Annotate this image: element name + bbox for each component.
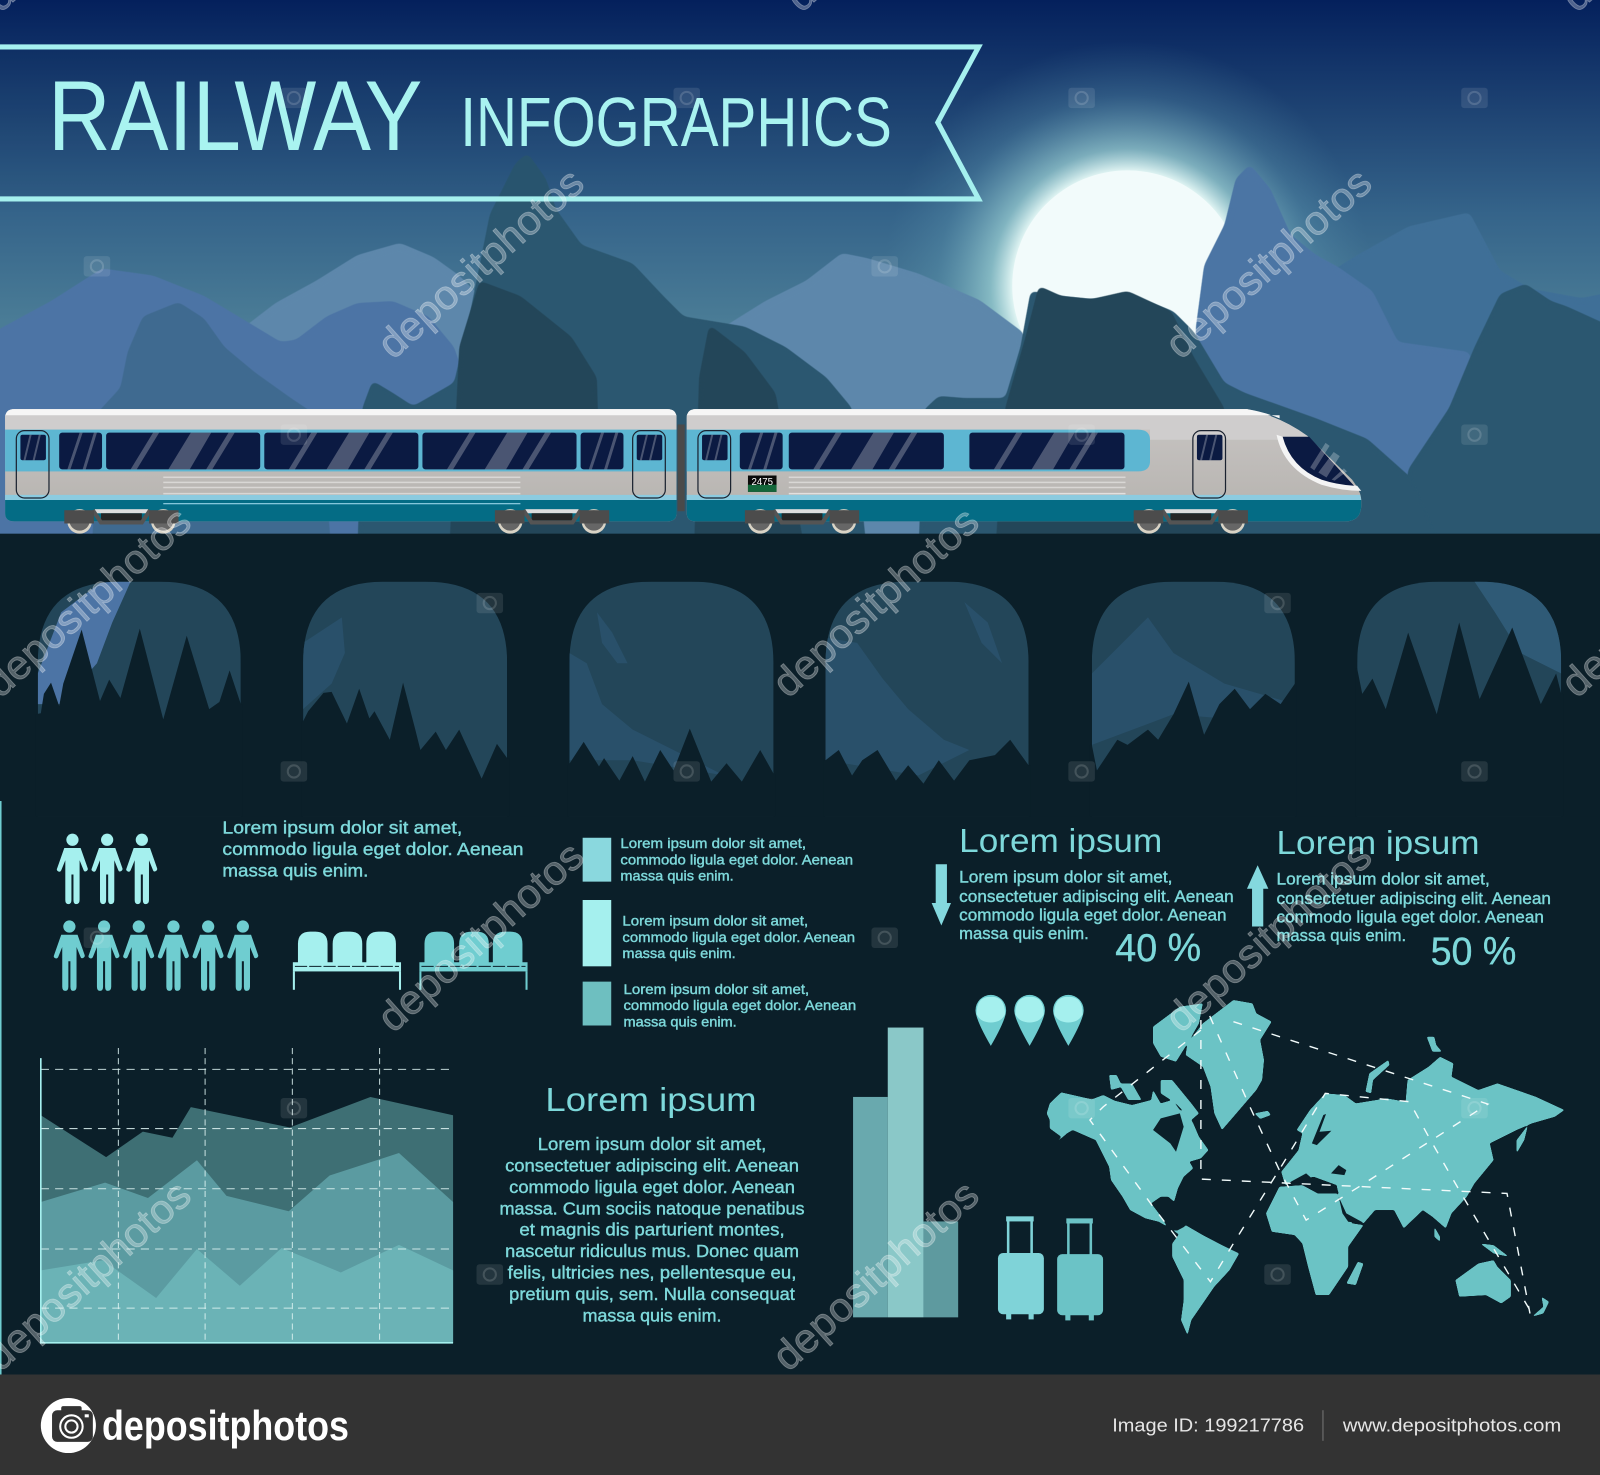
icon: suitcase teal [1057,1218,1103,1320]
rear carriage [5,409,677,521]
heading: Lorem ipsum [959,823,1162,860]
title: INFOGRAPHICS: INFOGRAPHICS [460,83,892,161]
description: Lorem ipsum dolor sit amet, [1277,871,1490,889]
paragraph: et magnis dis parturient montes, [519,1220,785,1240]
description: massa quis enim. [1277,927,1406,945]
people icons [54,834,258,991]
legend item 1: Lorem ipsum dolor sit amet, [620,836,806,851]
arch 4 [826,582,1028,784]
legend item 1 [583,836,853,884]
watermarks: depositphotos [1156,832,1380,1041]
logo wordmark: depositphotos [102,1402,349,1449]
mountains backdrop [0,153,1600,556]
bar chart [853,1028,958,1317]
continents [1047,1000,1564,1335]
legend item 3: commodo ligula eget dolor. Aenean [623,998,856,1013]
windshield [1277,435,1361,491]
paragraph: consectetuer adipiscing elit. Aenean [505,1155,799,1175]
number plate [748,476,777,492]
arch 5 [1092,582,1295,770]
area chart [41,1048,453,1343]
center text block [499,1082,805,1325]
arch 1 [38,582,241,719]
description: Lorem ipsum dolor sit amet, [959,869,1172,887]
legend [583,836,856,1030]
icon: down arrow [932,864,951,926]
paragraph: massa quis enim. [583,1305,721,1325]
paragraph: commodo ligula eget dolor. Aenean [509,1177,795,1197]
legend item 3 [583,982,856,1030]
legend item 3: massa quis enim. [623,1015,737,1030]
logo icon [41,1398,96,1453]
paragraph: nascetur ridiculus mus. Donec quam [505,1241,799,1261]
legend item 2 [583,900,855,966]
viaduct [0,534,1600,1376]
watermarks: depositphotos [763,1171,987,1379]
arch 6 [1357,582,1562,714]
icon: suitcase light [998,1216,1044,1319]
text block: people: massa quis enim. [222,861,368,881]
description [1277,871,1551,945]
watermarks: depositphotos [1156,159,1380,367]
watermarks: depositphotos [368,832,593,1041]
description [959,869,1234,943]
wheel bogies [64,509,1248,534]
legend item 3: Lorem ipsum dolor sit amet, [623,982,809,997]
value: 50 % [1431,930,1516,973]
title: RAILWAY: RAILWAY [48,60,422,171]
icon: up arrow [1247,865,1268,927]
night sky background [0,0,1600,536]
description: consectetuer adipiscing elit. Aenean [959,888,1234,906]
text block: people [222,818,523,881]
number plate: 2475 [751,477,773,488]
legend item 1: massa quis enim. [620,869,734,884]
world map with routes [1047,1000,1564,1335]
heading: Lorem ipsum [545,1082,757,1119]
paragraph: pretium quis, sem. Nulla consequat [509,1284,795,1304]
dashed flight routes [1090,1013,1532,1313]
side accent line [0,801,2,1376]
text block: people: Lorem ipsum dolor sit amet, [222,818,462,838]
stat block: 40 percent [932,823,1234,970]
legend item 2: massa quis enim. [622,946,736,961]
front carriage [687,409,1361,521]
stat block: 50 percent [1247,825,1551,973]
arch 3 [570,582,774,782]
image id: Image ID: 199217786 [1112,1415,1304,1436]
description: massa quis enim. [959,925,1089,943]
people row 1 [57,834,157,904]
train [5,409,1361,534]
seas and bays [1153,1113,1364,1223]
icons: map pins [976,995,1084,1046]
website: www.depositphotos.com [1342,1415,1561,1436]
title banner [0,47,979,199]
arches with forest silhouettes [38,582,1562,784]
description: commodo ligula eget dolor. Aenean [959,906,1227,924]
legend item 2: Lorem ipsum dolor sit amet, [622,914,808,929]
bench icon teal [419,932,528,990]
heading: Lorem ipsum [1277,825,1480,862]
moon with glow [883,41,1372,531]
bench icon light [293,932,401,990]
paragraph: Lorem ipsum dolor sit amet, [538,1134,766,1154]
watermarks: depositphotos [368,159,593,367]
description: consectetuer adipiscing elit. Aenean [1277,890,1551,908]
legend item 2: commodo ligula eget dolor. Aenean [622,930,855,945]
paragraph: felis, ultricies nes, pellentesque eu, [508,1263,796,1283]
value: 40 % [1115,927,1201,970]
legend item 1: commodo ligula eget dolor. Aenean [620,852,853,867]
people row 2 [54,920,258,991]
arch 2 [303,582,507,778]
coupling [678,424,685,511]
footer bar [0,1374,1600,1475]
watermarks: depositphotos [763,498,987,706]
paragraph [499,1134,805,1325]
paragraph: massa. Cum sociis natoque penatibus [499,1198,805,1218]
description: commodo ligula eget dolor. Aenean [1277,908,1544,926]
text block: people: commodo ligula eget dolor. Aenean [222,839,523,859]
